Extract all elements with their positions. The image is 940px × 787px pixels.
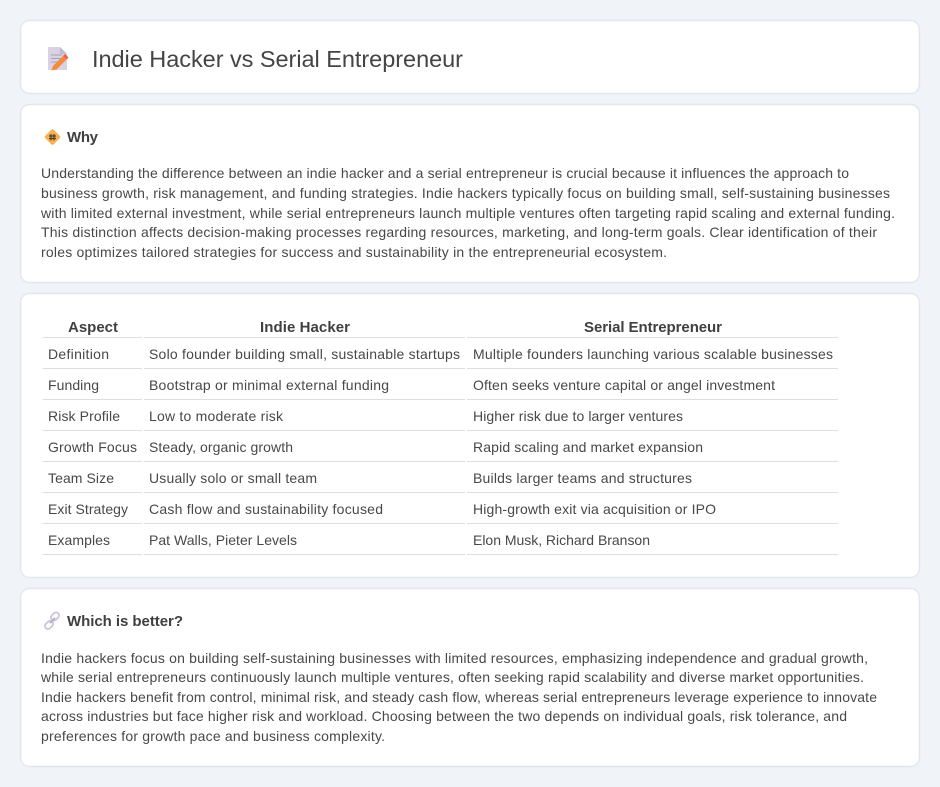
row: examples	[48, 532, 650, 548]
row: funding	[48, 377, 775, 393]
row: funding: Often seeks venture capital or angel investment	[473, 377, 775, 393]
title: Indie Hacker vs Serial Entrepreneur	[92, 46, 463, 72]
icon: link	[44, 611, 60, 630]
heading: why: Why	[67, 129, 99, 146]
row: risk profile: Higher risk due to larger ventures	[473, 408, 683, 424]
row: examples: Examples	[48, 532, 110, 548]
text block: why: This distinction affects decision-making processes regarding resources, marketing, and long-term goals. Clear identification of their	[41, 224, 877, 240]
row: exit strategy	[48, 501, 716, 517]
panel: why	[20, 104, 920, 282]
panel: title header	[20, 20, 920, 94]
table header row: Aspect	[68, 319, 118, 336]
row: risk profile	[48, 408, 683, 424]
text block: which is better: Indie hackers benefit from control, minimal risk, and steady cash flow, whereas serial entrepreneurs leverage experience to innovate	[41, 689, 877, 705]
text block: which is better: Indie hackers focus on building self-sustaining businesses with limited resources, emphasizing independence and gradual growth,	[41, 650, 868, 666]
row: risk profile: Low to moderate risk	[149, 408, 284, 424]
row: team size: Usually solo or small team	[149, 470, 317, 486]
row: exit strategy: High-growth exit via acquisition or IPO	[473, 501, 716, 517]
table header row: Indie Hacker	[260, 319, 350, 336]
heading: which is better: Which is better?	[67, 613, 183, 630]
text block: why: Understanding the difference between an indie hacker and a serial entrepreneur is crucial because it influences the approach to	[41, 165, 849, 181]
row: growth focus: Rapid scaling and market expansion	[473, 439, 703, 455]
row: growth focus	[48, 439, 703, 455]
row: growth focus: Steady, organic growth	[149, 439, 293, 455]
table header row	[68, 319, 722, 336]
row: examples: Elon Musk, Richard Branson	[473, 532, 650, 548]
row: definition: Definition	[48, 346, 109, 362]
row: funding: Funding	[48, 377, 99, 393]
text block: why: business growth, risk management, and funding strategies. Indie hackers typically focus on building small, self-sustaining businesses	[41, 185, 890, 201]
text block: which is better: while serial entrepreneurs continuously launch multiple ventures, often seeking rapid scalability and diverse market opportunities.	[40, 669, 864, 685]
text block: why: roles optimizes tailored strategies for success and sustainability in the entrepreneurial ecosystem.	[41, 244, 667, 260]
row: exit strategy: Cash flow and sustainability focused	[149, 501, 383, 517]
icon: document with pencil	[48, 47, 68, 70]
row: definition: Multiple founders launching various scalable businesses	[473, 346, 833, 362]
row: team size	[48, 470, 692, 486]
panel: which is better	[20, 588, 920, 766]
row: risk profile: Risk Profile	[48, 408, 120, 424]
text block: why	[40, 165, 895, 260]
row: funding: Bootstrap or minimal external funding	[149, 377, 389, 393]
text block: which is better: preferences for growth pace and business complexity.	[41, 728, 385, 744]
table header row: Serial Entrepreneur	[584, 319, 722, 336]
text block: why: with limited external investment, while serial entrepreneurs launch multiple ventures often targeting rapid scaling and external funding.	[40, 205, 895, 221]
text block: which is better	[40, 650, 877, 744]
row: team size: Builds larger teams and structures	[473, 470, 692, 486]
panel: comparison table	[20, 294, 920, 578]
row: definition	[48, 346, 833, 362]
row: team size: Team Size	[48, 470, 114, 486]
row: exit strategy: Exit Strategy	[48, 501, 128, 517]
row: definition: Solo founder building small, sustainable startups	[149, 346, 460, 362]
row: growth focus: Growth Focus	[48, 439, 137, 455]
row: examples: Pat Walls, Pieter Levels	[149, 532, 297, 548]
icon: orange diamond	[44, 129, 61, 145]
text block: which is better: across industries but face higher risk and workload. Choosing between the two depends on individual goals, risk tolerance, and	[41, 708, 847, 724]
